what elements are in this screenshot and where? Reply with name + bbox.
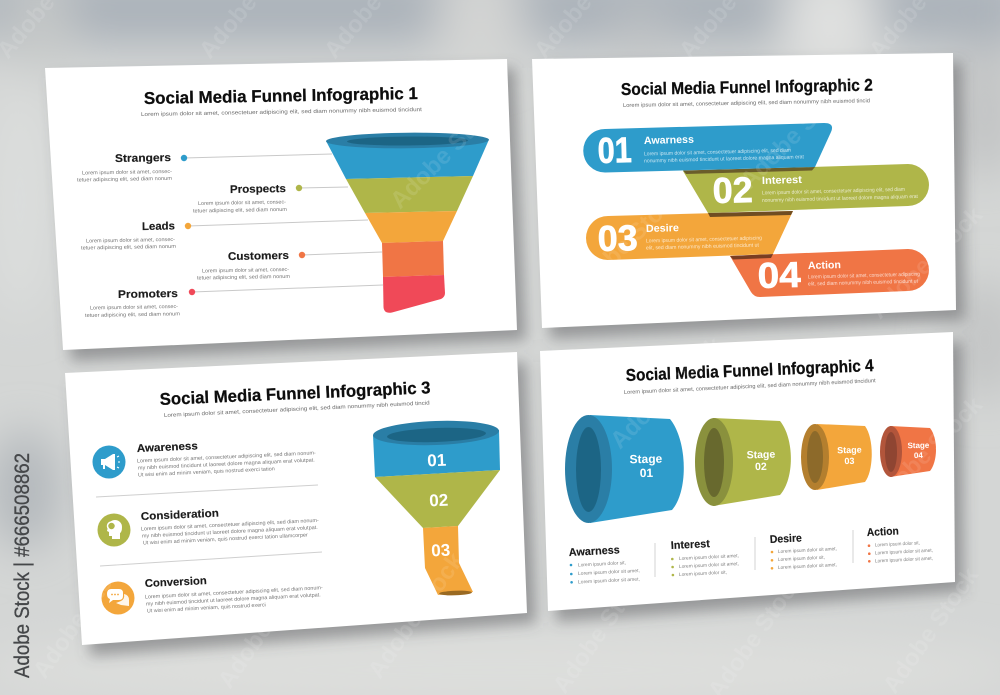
label: Promoters bbox=[85, 288, 195, 319]
band 03: Desire: Desire bbox=[646, 222, 679, 235]
watermark overlay: Adobe Stock bbox=[605, 331, 728, 454]
band 03: Desire: Lorem ipsum dolor sit amet, consectetuer adipiscing bbox=[646, 235, 762, 244]
column separators bbox=[655, 530, 853, 577]
label: Customers: tetuer adipiscing elit, sed diam nonum bbox=[197, 274, 290, 281]
list: Interest: Interest bbox=[671, 538, 710, 552]
list: Desire: Lorem ipsum dolor sit amet, bbox=[778, 546, 837, 555]
band 03: Desire bbox=[586, 211, 793, 260]
cylinder: stage 01: 01 bbox=[640, 466, 654, 480]
band 02: Interest: Interest bbox=[762, 174, 803, 187]
row: Conversion bbox=[102, 575, 323, 614]
watermark overlay: Adobe Stock bbox=[865, 201, 988, 324]
icon: megaphone bbox=[92, 446, 126, 478]
panel: funnel infographic 3 bbox=[65, 352, 527, 645]
row: Consideration: Lorem ipsum dolor sit amet, consectetuer adipiscing elit, sed diam nonum- bbox=[141, 518, 319, 532]
label: Promoters: Lorem ipsum dolor sit amet, consec- bbox=[90, 304, 178, 311]
list: Desire: Lorem ipsum dolor sit, bbox=[778, 555, 825, 563]
label: Leads: Leads bbox=[142, 220, 175, 233]
subtitle 1: Lorem ipsum dolor sit amet, consectetuer adipiscing elit, sed diam nonummy nibh euismod tincidunt bbox=[141, 107, 423, 118]
band 03: Desire: elit, sed diam nonummy nibh euismod tincidunt ut bbox=[646, 243, 760, 251]
row: Awareness: Ut wisi enim ad minim veniam, quis nostrud exerci tation bbox=[138, 466, 275, 478]
funnel chart with three numbered stages bbox=[373, 419, 500, 596]
title 4: Social Media Funnel Infographic 4 bbox=[625, 356, 874, 385]
list: Action: Lorem ipsum dolor sit amet, bbox=[875, 556, 933, 564]
cylinder: stage 01: Stage bbox=[629, 452, 663, 466]
band 02: Interest: 02 bbox=[712, 169, 753, 211]
band 04: Action: elit, sed diam nonummy nibh euismod tincidunt ut bbox=[808, 279, 919, 287]
watermark overlay: Adobe Stock bbox=[735, 71, 858, 194]
title 3: Social Media Funnel Infographic 3 bbox=[159, 378, 431, 409]
cylinder: stage 02 bbox=[695, 418, 791, 506]
connector lines bbox=[184, 154, 383, 292]
list: Awarness: Awarness bbox=[569, 544, 620, 559]
list: Interest: Lorem ipsum dolor sit amet, bbox=[679, 553, 739, 562]
band 02: Interest bbox=[683, 164, 929, 213]
label: Leads: tetuer adipiscing elit, sed diam nonum bbox=[81, 244, 176, 251]
band 03: Desire: 03 bbox=[597, 217, 638, 259]
funnel chart bbox=[326, 132, 489, 313]
row: Consideration: Consideration bbox=[141, 508, 219, 523]
label: Prospects: Lorem ipsum dolor sit amet, consec- bbox=[198, 199, 286, 207]
row: Conversion: my nibh euismod tincidunt ut laoreet dolore magna aliquam erat volutpat. bbox=[146, 592, 321, 607]
label: Prospects bbox=[193, 183, 302, 214]
cylinder: stage 04: Stage bbox=[907, 441, 930, 450]
subtitle 4: Lorem ipsum dolor sit amet, consectetuer adipiscing elit, sed diam nonummy nibh euismod tincidunt bbox=[624, 378, 876, 396]
funnel chart with three numbered stages: 01 bbox=[427, 451, 447, 470]
list: Awarness: Lorem ipsum dolor sit amet, bbox=[578, 576, 640, 585]
row: Consideration bbox=[98, 508, 319, 546]
row: Awareness: Awareness bbox=[137, 440, 198, 455]
watermark overlay: Adobe Stock bbox=[548, 562, 654, 695]
label: Promoters: tetuer adipiscing elit, sed diam nonum bbox=[85, 311, 180, 319]
cylinder: stage 04: 04 bbox=[914, 451, 924, 460]
dividers bbox=[96, 485, 322, 566]
subtitle 3: Lorem ipsum dolor sit amet, consectetuer adipiscing elit, sed diam nonummy nibh euismod tincid bbox=[164, 400, 430, 419]
label: Strangers: tetuer adipiscing elit, sed diam nonum bbox=[77, 176, 172, 183]
label: Promoters: Promoters bbox=[118, 288, 178, 301]
label: Prospects: Prospects bbox=[230, 183, 286, 196]
funnel chart with three numbered stages: 02 bbox=[429, 491, 449, 510]
band 02: Interest: nonummy nibh euismod tincidunt ut laoreet dolore magna aliquam erat bbox=[762, 194, 919, 204]
row: Conversion: Ut wisi enim ad minim veniam, quis nostrud exerci bbox=[147, 602, 266, 614]
cylinder: stage 02: Stage bbox=[746, 449, 776, 461]
band 04: Action: Action bbox=[808, 259, 841, 272]
cylinder: stage 02: 02 bbox=[755, 461, 767, 473]
list: Action: Lorem ipsum dolor sit, bbox=[875, 540, 920, 548]
watermark overlay: Adobe Stock bbox=[363, 547, 469, 683]
row: Awareness bbox=[92, 440, 316, 478]
label: Strangers: Lorem ipsum dolor sit amet, consec- bbox=[82, 169, 172, 176]
row: Conversion: Lorem ipsum dolor sit amet, consectetuer adipiscing elit, sed diam nonum- bbox=[145, 585, 323, 600]
band 01: Awarness: 01 bbox=[597, 129, 632, 171]
watermark overlay: Adobe Stock bbox=[878, 562, 984, 695]
band 04: Action: Lorem ipsum dolor sit amet, consectetuer adipiscing bbox=[808, 272, 920, 280]
label: Customers bbox=[197, 250, 305, 281]
watermark overlay: Adobe Stock bbox=[213, 557, 319, 693]
panel: funnel infographic 4 bbox=[540, 332, 955, 611]
list: Action: Lorem ipsum dolor sit amet, bbox=[875, 548, 933, 556]
row: Consideration: my nibh euismod tincidunt ut laoreet dolore magna aliquam erat volutpat. bbox=[142, 525, 318, 539]
cylinder: stage 04 bbox=[880, 426, 936, 477]
list: Awarness: Lorem ipsum dolor sit amet, bbox=[578, 568, 640, 577]
list: Interest bbox=[671, 538, 739, 578]
title 2: Social Media Funnel Infographic 2 bbox=[621, 76, 873, 99]
label: Leads: Lorem ipsum dolor sit amet, consec- bbox=[86, 237, 175, 244]
stock credit text: Adobe Stock | #666508862 bbox=[11, 453, 34, 678]
label: Strangers bbox=[77, 152, 187, 183]
band 04: Action bbox=[730, 249, 929, 297]
band 01: Awarness: Lorem ipsum dolor sit amet, consectetuer adipiscing elit, sed diam bbox=[644, 148, 791, 157]
label: Leads bbox=[81, 220, 191, 251]
label: Strangers: Strangers bbox=[115, 152, 171, 165]
band 02: Interest: Lorem ipsum dolor sit amet, consectetuer adipiscing elit, sed diam bbox=[762, 187, 905, 196]
list: Desire: Desire bbox=[770, 532, 802, 546]
list: Interest: Lorem ipsum dolor sit amet, bbox=[679, 561, 739, 570]
band 01: Awarness: nonummy nibh euismod tincidunt ut laoreet dolore magna aliquam erat bbox=[644, 154, 805, 164]
list: Desire bbox=[770, 532, 837, 571]
icon: head with gear bbox=[98, 514, 130, 546]
list: Awarness: Lorem ipsum dolor sit, bbox=[578, 560, 626, 568]
watermark overlay: Adobe Stock bbox=[385, 91, 508, 214]
cylinder: stage 03 bbox=[801, 424, 872, 490]
label: Customers: Customers bbox=[228, 250, 289, 263]
label: Prospects: tetuer adipiscing elit, sed diam nonum bbox=[193, 207, 287, 214]
row: Conversion: Conversion bbox=[145, 575, 207, 590]
list: Action: Action bbox=[867, 525, 899, 539]
label: Customers: Lorem ipsum dolor sit amet, consec- bbox=[202, 267, 289, 274]
cylinder: stage 03: Stage bbox=[837, 445, 862, 455]
watermark overlay: Adobe Stock bbox=[865, 391, 988, 514]
list: Action bbox=[867, 525, 933, 564]
watermark overlay: Adobe Stock bbox=[28, 547, 134, 683]
title 1: Social Media Funnel Infographic 1 bbox=[144, 84, 418, 108]
row: Awareness: my nibh euismod tincidunt ut laoreet dolore magna aliquam erat volutpat. bbox=[138, 457, 315, 471]
band 04: Action: 04 bbox=[757, 254, 801, 296]
cylinder: stage 01 bbox=[565, 415, 684, 523]
band 01: Awarness: Awarness bbox=[644, 134, 694, 147]
panel: funnel infographic 1 bbox=[45, 59, 517, 350]
row: Awareness: Lorem ipsum dolor sit amet, consectetuer adipiscing elit, sed diam nonum- bbox=[137, 450, 316, 464]
cylinder: stage 03: 03 bbox=[844, 456, 855, 466]
row: Consideration: Ut wisi enim ad minim veniam, quis nostrud exerci tation ullamcorper bbox=[143, 532, 308, 546]
funnel chart with three numbered stages: 03 bbox=[431, 541, 451, 560]
list: Desire: Lorem ipsum dolor sit amet, bbox=[778, 562, 837, 571]
panel: funnel infographic 2 bbox=[532, 53, 956, 328]
list: Awarness bbox=[569, 544, 640, 585]
icon: chat bubbles bbox=[102, 582, 134, 614]
band 01: Awarness bbox=[583, 123, 832, 172]
subtitle 2: Lorem ipsum dolor sit amet, consectetuer adipiscing elit, sed diam nonummy nibh euismod tincid bbox=[623, 98, 870, 109]
list: Interest: Lorem ipsum dolor sit, bbox=[679, 570, 727, 578]
watermark overlay: Adobe Stock bbox=[565, 181, 688, 304]
